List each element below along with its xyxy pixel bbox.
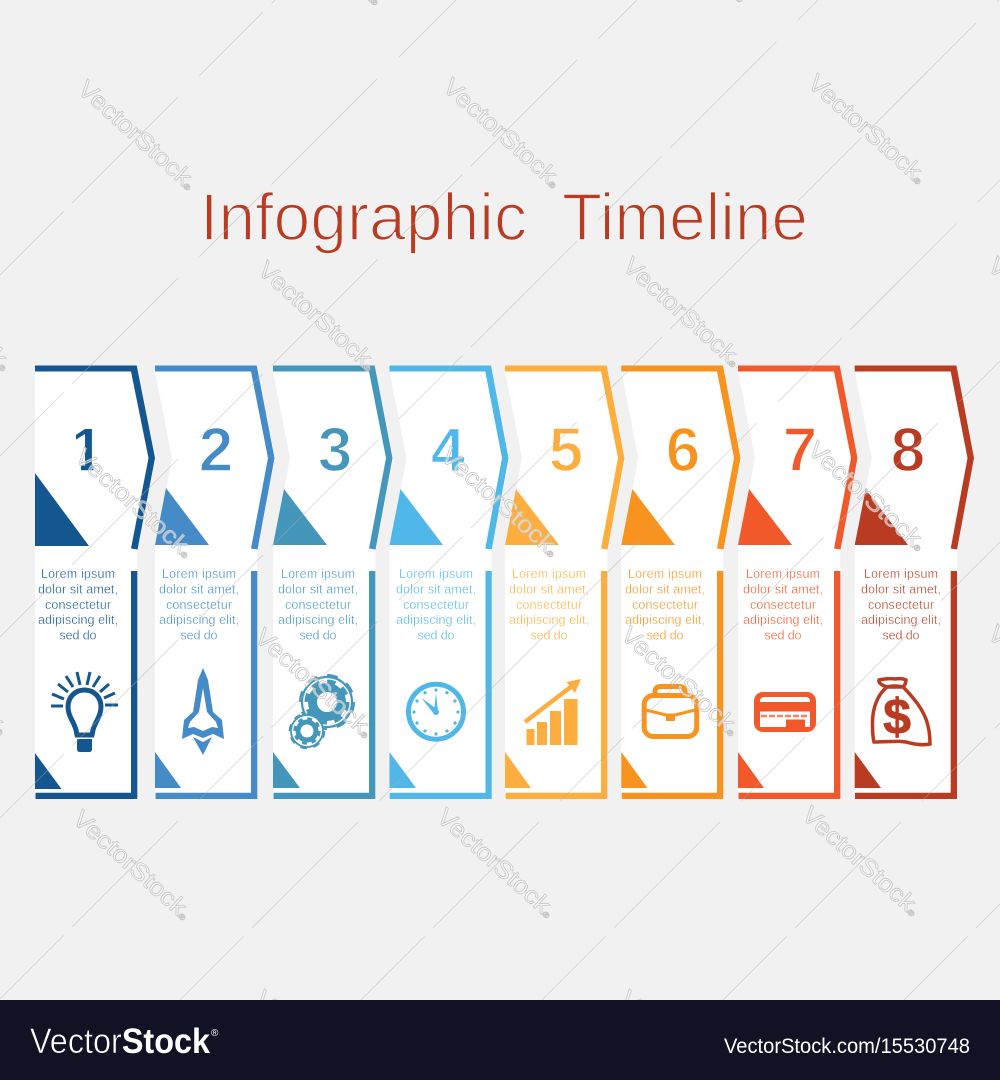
- watermarks: VectorStock ®: [435, 442, 565, 563]
- icon: clock: [408, 684, 464, 739]
- watermarks: VectorStock ®: [802, 436, 932, 557]
- panel: step 8: dolor sit amet,: [861, 582, 941, 596]
- panel: step 4: 4: [431, 416, 466, 485]
- panel: step 5: consectetur: [516, 598, 582, 612]
- panel: step 6: adipiscing elit,: [625, 613, 705, 627]
- panel: step 6: 6: [666, 416, 700, 485]
- panel: step 7: consectetur: [750, 598, 816, 612]
- panel: step 2: consectetur: [166, 598, 232, 612]
- panel: step 7: adipiscing elit,: [743, 613, 823, 627]
- panel: step 5: Lorem ipsum: [512, 567, 586, 581]
- panel: step 7: dolor sit amet,: [743, 582, 823, 596]
- panel: step 4: consectetur: [403, 598, 469, 612]
- panel: step 1: consectetur: [45, 598, 111, 612]
- watermarks: VectorStock ®: [431, 803, 561, 924]
- panel: step 7: 7: [783, 416, 817, 485]
- panel: step 3: 3: [318, 416, 352, 485]
- panel: step 6: sed do: [646, 629, 684, 643]
- panel: step 2: Lorem ipsum: [162, 567, 236, 581]
- title: Timeline: [562, 180, 808, 255]
- icon: money bag: [872, 679, 930, 745]
- title: [200, 180, 808, 255]
- panel: step 2: 2: [199, 416, 233, 485]
- panel: step 6: dolor sit amet,: [625, 582, 705, 596]
- panel: step 1: 1: [70, 416, 104, 485]
- panel: step 8: Lorem ipsum: [864, 567, 938, 581]
- panel: step 7: [738, 366, 858, 799]
- panel: step 6: consectetur: [632, 598, 698, 612]
- panel: step 2: dolor sit amet,: [159, 582, 239, 596]
- panel: step 1: dolor sit amet,: [38, 582, 118, 596]
- panel: step 8: adipiscing elit,: [861, 613, 941, 627]
- registered mark: ®: [211, 1028, 219, 1039]
- watermarks: VectorStock ®: [617, 252, 747, 373]
- panel: step 8: sed do: [882, 629, 920, 643]
- panel: step 5: 5: [549, 416, 583, 485]
- watermarks: VectorStock ®: [67, 805, 197, 926]
- panel: step 6: Lorem ipsum: [628, 567, 702, 581]
- watermarks: VectorStock ®: [615, 621, 745, 742]
- panel: step 5: adipiscing elit,: [509, 613, 589, 627]
- footer logo: VectorStock: [30, 1022, 210, 1061]
- watermarks: VectorStock ®: [252, 256, 382, 377]
- panel: step 4: [390, 366, 509, 799]
- icon: rocket: [182, 668, 224, 755]
- panel: step 5: dolor sit amet,: [509, 582, 589, 596]
- panel: step 3: adipiscing elit,: [278, 613, 358, 627]
- watermarks: VectorStock ®: [796, 801, 926, 922]
- watermarks: VectorStock ®: [802, 69, 932, 190]
- panel: step 8: 8: [891, 416, 925, 485]
- panel: step 1: sed do: [60, 629, 97, 643]
- panel: step 3: sed do: [300, 629, 337, 643]
- icon: credit card: [754, 692, 816, 732]
- panel: step 1: Lorem ipsum: [41, 567, 115, 581]
- panel: step 1: [35, 366, 155, 799]
- panel: step 6: [621, 366, 741, 799]
- panel: step 5: [505, 366, 625, 799]
- title: Infographic: [200, 180, 527, 255]
- panel: step 8: consectetur: [868, 598, 934, 612]
- icon: money bag: $: [883, 689, 911, 745]
- panel: step 1: adipiscing elit,: [38, 613, 118, 627]
- watermarks: VectorStock ®: [437, 73, 567, 194]
- panel: step 3: Lorem ipsum: [281, 567, 355, 581]
- watermarks: VectorStock ®: [69, 443, 199, 564]
- watermarks: VectorStock ®: [72, 75, 202, 196]
- panel: step 3: consectetur: [285, 598, 351, 612]
- panel: step 8: [855, 366, 974, 799]
- panel: step 7: sed do: [764, 629, 802, 643]
- icon: briefcase: [644, 686, 697, 736]
- panel: step 3: [273, 366, 393, 799]
- panel: step 5: sed do: [530, 629, 568, 643]
- panel: step 4: sed do: [418, 629, 455, 643]
- panel: step 4: Lorem ipsum: [399, 567, 473, 581]
- panel: step 4: adipiscing elit,: [396, 613, 476, 627]
- panel: step 2: adipiscing elit,: [159, 613, 239, 627]
- icon: rising bar chart: [525, 679, 581, 745]
- watermarks: VectorStock ®: [249, 623, 379, 744]
- panel: step 2: [155, 366, 275, 799]
- panel: step 3: dolor sit amet,: [278, 582, 358, 596]
- icon: light bulb: [51, 672, 118, 752]
- panel: step 4: dolor sit amet,: [396, 582, 476, 596]
- panel: step 2: sed do: [180, 629, 218, 643]
- icon: gears: [290, 675, 354, 748]
- footer bar: [0, 1000, 1000, 1080]
- footer image id: VectorStock.com/15530748: [724, 1035, 970, 1058]
- panel: step 7: Lorem ipsum: [746, 567, 820, 581]
